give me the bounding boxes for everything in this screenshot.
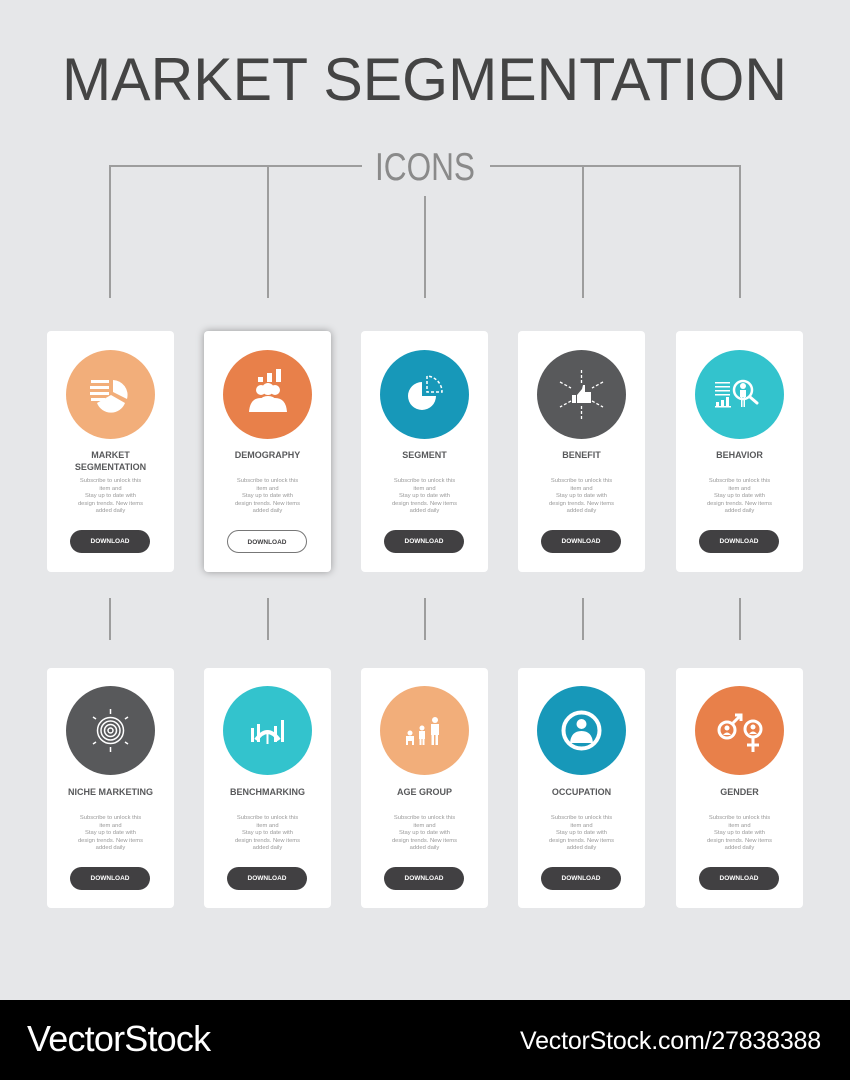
card: behavior (676, 331, 803, 572)
icon: person in circle (537, 686, 626, 775)
card: benefit: BENEFIT (562, 450, 601, 460)
card: niche marketing: Subscribe to unlock this (80, 815, 141, 821)
card: behavior: BEHAVIOR (716, 450, 763, 460)
card: benefit (518, 331, 645, 572)
card: benchmarking: Stay up to date with (242, 830, 293, 836)
card: occupation: item and (570, 822, 593, 828)
card: gender: GENDER (720, 787, 759, 797)
card: gender (676, 668, 803, 908)
card: niche marketing: NICHE MARKETING (68, 787, 153, 797)
card: occupation: Stay up to date with (556, 830, 607, 836)
connector lines (109, 165, 741, 640)
card: age group (361, 668, 488, 908)
card: segment: item and (413, 486, 436, 492)
card: age group: item and (413, 822, 436, 828)
card: benchmarking: item and (256, 822, 279, 828)
card: benchmarking: design trends. New items (235, 838, 300, 844)
card: behavior: added daily (725, 508, 754, 514)
card: gender: DOWNLOAD (720, 875, 758, 882)
card: demography: design trends. New items (235, 500, 300, 506)
card: behavior: design trends. New items (707, 500, 772, 506)
icon: segment pie (380, 350, 469, 439)
title: ICONS (375, 146, 475, 189)
card: demography: Stay up to date with (242, 493, 293, 499)
card: niche marketing: design trends. New items (78, 838, 143, 844)
card: demography: DOWNLOAD (248, 539, 286, 546)
card: market segmentation: added daily (96, 508, 125, 514)
card: niche marketing: item and (99, 822, 122, 828)
card: market segmentation: design trends. New items (78, 500, 143, 506)
card: age group: DOWNLOAD (404, 875, 444, 882)
card: age group: added daily (410, 845, 439, 851)
card: segment: DOWNLOAD (404, 538, 444, 545)
card: market segmentation (47, 331, 174, 572)
card: market segmentation: SEGMENTATION (75, 462, 146, 472)
card: demography: added daily (253, 508, 282, 514)
card: gender: added daily (725, 845, 754, 851)
card: gender: item and (728, 822, 751, 828)
icon: family (380, 686, 469, 775)
card: gender: Subscribe to unlock this (709, 815, 770, 821)
card: age group: design trends. New items (392, 838, 457, 844)
card: market segmentation: Stay up to date with (85, 493, 136, 499)
title: MARKET SEGMENTATION (62, 46, 787, 113)
card: demography (204, 331, 331, 572)
card: benchmarking: BENCHMARKING (230, 787, 305, 797)
card: niche marketing: added daily (96, 845, 125, 851)
card: niche marketing (47, 668, 174, 908)
card: segment: design trends. New items (392, 500, 457, 506)
card: segment: added daily (410, 508, 439, 514)
icon: thumbs up (537, 350, 626, 439)
card: benefit: design trends. New items (549, 500, 614, 506)
icon: target (66, 686, 155, 775)
card: demography: Subscribe to unlock this (237, 478, 298, 484)
footer brand: VectorStock (27, 1018, 210, 1059)
card: age group: Stay up to date with (399, 830, 450, 836)
card: niche marketing: DOWNLOAD (90, 875, 130, 882)
title (62, 46, 787, 189)
icon: gender symbols (695, 686, 784, 775)
card: benchmarking: DOWNLOAD (248, 875, 286, 882)
card: market segmentation: Subscribe to unlock this (80, 478, 141, 484)
card: gender: design trends. New items (707, 838, 772, 844)
card: benchmarking (204, 668, 331, 908)
card: benefit: added daily (567, 508, 596, 514)
card: demography: DEMOGRAPHY (235, 450, 300, 460)
card: market segmentation: item and (99, 486, 122, 492)
card: occupation: design trends. New items (549, 838, 614, 844)
card: occupation: OCCUPATION (552, 787, 611, 797)
card: behavior: Subscribe to unlock this (709, 478, 770, 484)
footer (0, 1000, 850, 1080)
card: behavior: Stay up to date with (714, 493, 765, 499)
footer url: VectorStock.com/27838388 (520, 1027, 821, 1055)
card: niche marketing: Stay up to date with (85, 830, 136, 836)
icon: magnifier person (695, 350, 784, 439)
card: market segmentation: DOWNLOAD (90, 538, 130, 545)
icon: pie chart (66, 350, 155, 439)
card: benefit: DOWNLOAD (562, 538, 600, 545)
icon: people with bars (223, 350, 312, 439)
card: segment: SEGMENT (402, 450, 447, 460)
card: demography: item and (256, 486, 279, 492)
card: benefit: item and (570, 486, 593, 492)
card: occupation: Subscribe to unlock this (551, 815, 612, 821)
card: occupation: added daily (567, 845, 596, 851)
card: gender: Stay up to date with (714, 830, 765, 836)
card: behavior: item and (728, 486, 751, 492)
card: age group: AGE GROUP (397, 787, 452, 797)
card: benefit: Stay up to date with (556, 493, 607, 499)
icon: gauge bars (223, 686, 312, 775)
card: occupation: DOWNLOAD (562, 875, 600, 882)
card: behavior: DOWNLOAD (720, 538, 758, 545)
card: benchmarking: Subscribe to unlock this (237, 815, 298, 821)
card: age group: Subscribe to unlock this (394, 815, 455, 821)
card: market segmentation: MARKET (91, 450, 130, 460)
card: benchmarking: added daily (253, 845, 282, 851)
card: segment: Subscribe to unlock this (394, 478, 455, 484)
card: benefit: Subscribe to unlock this (551, 478, 612, 484)
card: segment: Stay up to date with (399, 493, 450, 499)
card: occupation (518, 668, 645, 908)
card: segment (361, 331, 488, 572)
